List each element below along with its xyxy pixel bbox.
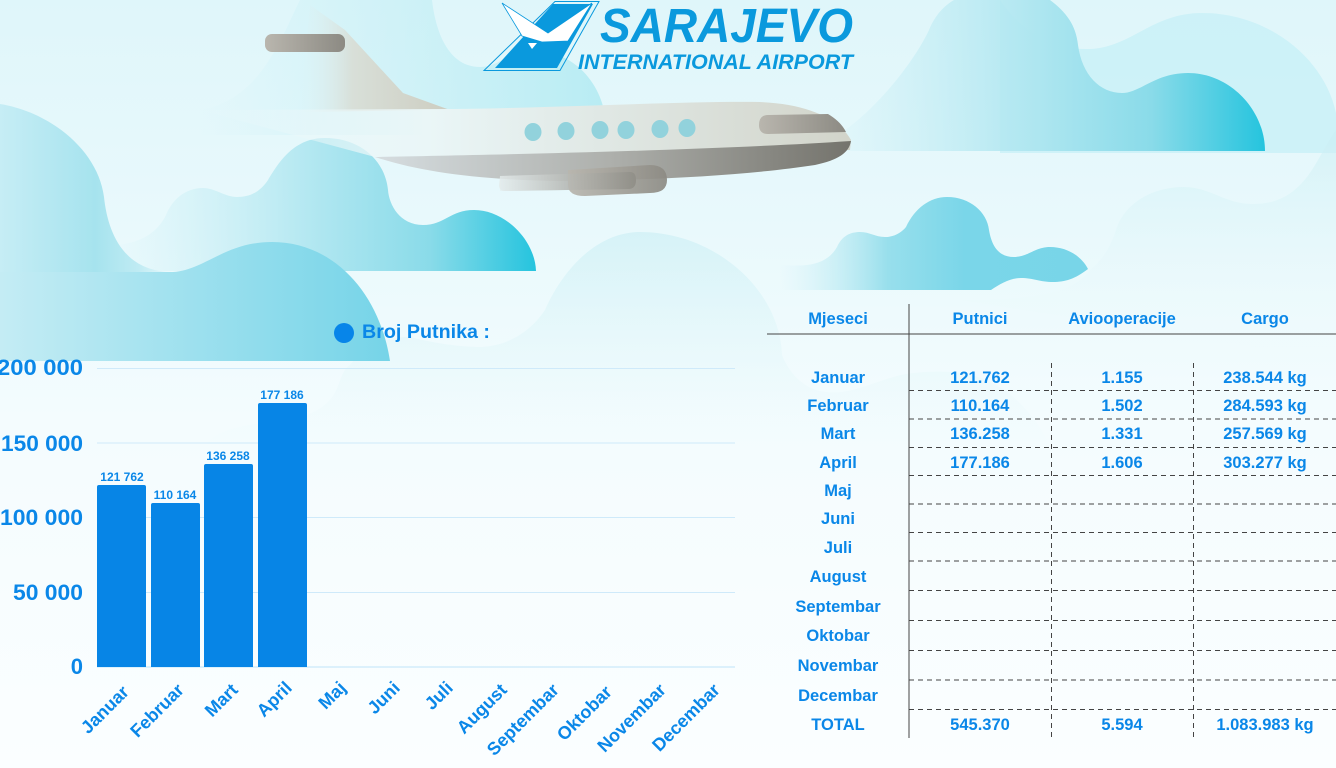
stabilizer	[265, 34, 345, 52]
x axis labels: Juni	[364, 678, 404, 718]
month column: Februar	[807, 397, 869, 415]
front engine pod	[568, 165, 667, 196]
cloud: top right	[810, 0, 1265, 151]
bar value labels	[100, 388, 304, 502]
x axis labels: Oktobar	[553, 682, 616, 745]
passengers column: 121.762	[950, 369, 1010, 387]
cloud: left	[0, 104, 173, 275]
logo wordmark: SARAJEVO	[600, 0, 853, 53]
month column: April	[819, 454, 857, 472]
y axis labels: 100 000	[0, 505, 83, 530]
month column: Decembar	[798, 687, 878, 705]
cargo column: 303.277 kg	[1223, 454, 1307, 472]
month column: Mart	[821, 425, 856, 443]
month column: Septembar	[795, 598, 881, 616]
x axis labels: Januar	[77, 682, 133, 738]
x axis labels	[77, 678, 724, 760]
bar value labels: 136 258	[206, 449, 250, 463]
y axis labels: 50 000	[13, 580, 83, 605]
legend: Broj Putnika :	[362, 322, 490, 343]
passengers column: 136.258	[950, 425, 1010, 443]
cloud: bottom right faint	[960, 130, 1336, 360]
windows	[524, 119, 696, 141]
month column: Maj	[824, 482, 852, 500]
month column: Oktobar	[806, 627, 870, 645]
operations column: 1.155	[1101, 369, 1143, 387]
cloud: centre large faint	[207, 232, 1061, 500]
operations column: 1.606	[1101, 454, 1143, 472]
cargo column: 238.544 kg	[1223, 369, 1307, 387]
bar value labels: 121 762	[100, 470, 144, 484]
belly	[375, 141, 851, 181]
table header: Mjeseci	[808, 310, 868, 328]
table header: Aviooperacije	[1068, 310, 1176, 328]
x axis labels: April	[253, 678, 296, 721]
month column: Juni	[821, 510, 855, 528]
month column	[795, 369, 881, 734]
logo mark	[484, 2, 599, 70]
passengers column: 110.164	[951, 397, 1010, 415]
passengers column: 545.370	[950, 716, 1010, 734]
cockpit window	[759, 114, 846, 134]
logo	[484, 0, 855, 74]
y axis labels: 0	[71, 654, 83, 679]
cloud: lower left	[0, 242, 390, 361]
operations column: 1.331	[1101, 425, 1143, 443]
logo tagline: INTERNATIONAL AIRPORT	[578, 51, 855, 74]
passengers column	[950, 369, 1010, 734]
rear engine pod	[499, 172, 636, 191]
cloud: top centre	[200, 0, 607, 135]
y axis labels	[0, 355, 83, 679]
x axis labels: Decembar	[648, 680, 724, 755]
table header: Cargo	[1241, 310, 1289, 328]
data table	[767, 304, 1336, 738]
tail fin	[300, 5, 450, 112]
bar value labels: 177 186	[260, 388, 304, 402]
month column: August	[810, 568, 867, 586]
table header	[808, 310, 1289, 328]
x axis labels: Septembar	[483, 680, 563, 760]
cargo column	[1216, 369, 1314, 734]
bar value labels: 110 164	[154, 488, 197, 502]
airplane	[200, 5, 851, 196]
x axis labels: August	[453, 680, 511, 738]
month column: TOTAL	[811, 716, 865, 734]
cargo column: 1.083.983 kg	[1216, 716, 1314, 734]
x axis labels: Maj	[314, 678, 350, 713]
table header: Putnici	[952, 310, 1008, 328]
cloud: small right	[780, 197, 1088, 290]
passengers column: 177.186	[950, 454, 1010, 472]
x axis labels: Juli	[421, 678, 457, 714]
cloud: upper left	[110, 138, 536, 271]
operations column: 1.502	[1101, 397, 1143, 415]
bar chart	[0, 355, 735, 760]
y axis labels: 150 000	[1, 431, 83, 456]
x axis labels: Novembar	[593, 680, 670, 756]
month column: Novembar	[798, 657, 879, 675]
x axis labels: Mart	[201, 680, 242, 721]
x axis labels: Februar	[126, 680, 188, 741]
month column: Juli	[824, 539, 852, 557]
cargo column: 284.593 kg	[1223, 397, 1307, 415]
operations column: 5.594	[1101, 716, 1143, 734]
month column: Januar	[811, 369, 866, 387]
engine shadow	[500, 172, 636, 191]
operations column	[1101, 369, 1143, 734]
fuselage	[200, 102, 851, 157]
cloud: top right large faint	[1000, 0, 1336, 153]
cargo column: 257.569 kg	[1223, 425, 1307, 443]
bars	[97, 403, 307, 667]
